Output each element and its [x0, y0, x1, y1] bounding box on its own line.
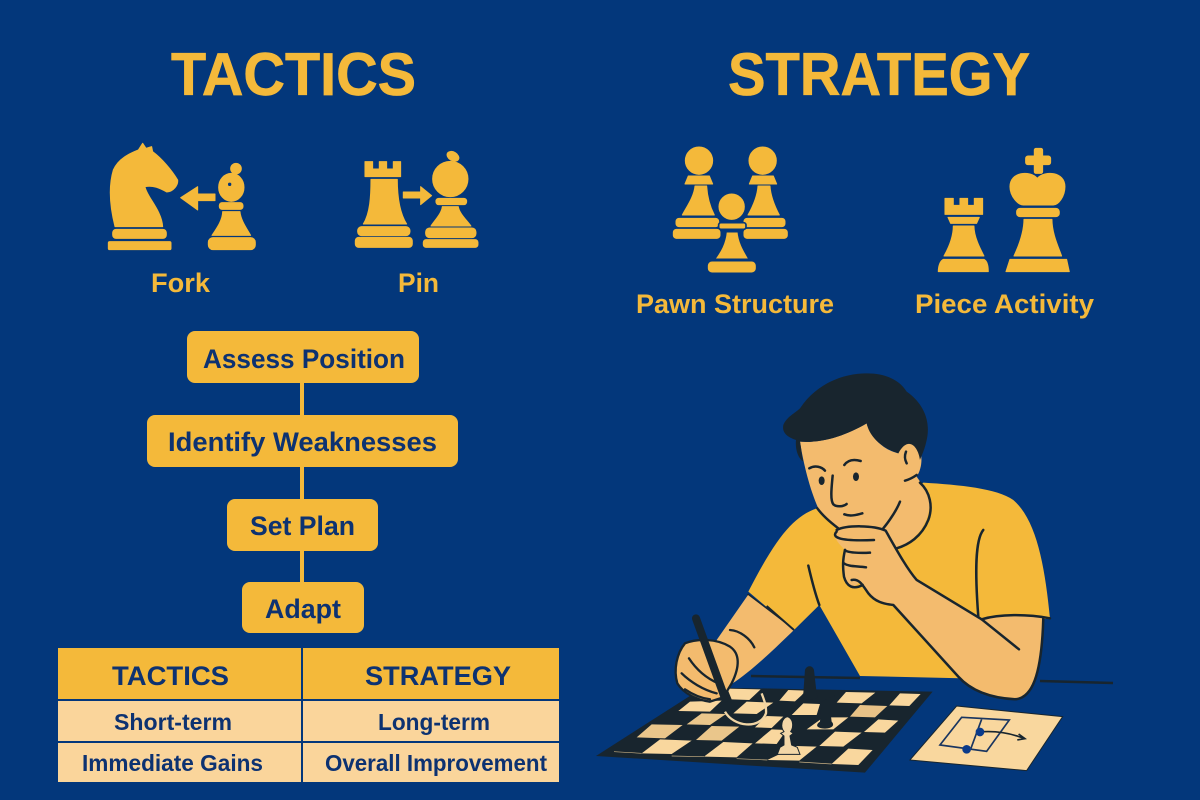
icon: pawn structure, three pawns [673, 147, 787, 272]
right arm and hand [835, 526, 1043, 699]
sleeve edge [767, 606, 794, 630]
flow connectors [300, 380, 304, 586]
hair [783, 373, 928, 462]
shirt [748, 483, 1050, 678]
pencil [696, 618, 725, 698]
hand lines [682, 630, 754, 699]
comparison table [58, 648, 559, 782]
board base [596, 687, 933, 773]
label: pawn structure: Pawn Structure [636, 289, 834, 319]
flow step: set plan: Set Plan [250, 511, 355, 541]
dark chess pieces [802, 666, 835, 729]
light squares [637, 689, 921, 765]
left arm and hand [717, 595, 794, 684]
board front highlight [614, 752, 832, 764]
flow step: identify weaknesses: Identify Weaknesses [168, 427, 437, 457]
icon: piece activity, rook and king [938, 148, 1069, 272]
label: fork: Fork [151, 268, 211, 298]
eyes [819, 476, 825, 485]
flow step: identify weaknesses [147, 415, 458, 467]
flow step: assess position [187, 331, 419, 383]
capture ring [725, 693, 766, 724]
flow step: adapt [242, 582, 364, 633]
title: strategy: STRATEGY [728, 41, 1030, 108]
light pawn [777, 717, 800, 754]
comparison table: Overall Improvement [325, 750, 547, 776]
label: pin: Pin [398, 268, 439, 298]
flow step: adapt: Adapt [265, 594, 341, 624]
comparison table: Immediate Gains [82, 750, 263, 776]
comparison table: STRATEGY [365, 661, 511, 691]
comparison table: Short-term [114, 709, 232, 735]
label: piece activity: Piece Activity [915, 289, 1094, 319]
head and neck [800, 423, 930, 548]
title: tactics: TACTICS [171, 41, 416, 108]
comparison table: Long-term [378, 709, 490, 735]
illustration: thinking person [748, 373, 1050, 699]
illustration: plan sheet with diagram [910, 706, 1063, 771]
comparison table: TACTICS [112, 661, 229, 691]
icon: fork, knight and bishop with arrow [108, 143, 255, 250]
flow step: set plan [227, 499, 378, 551]
illustration: chessboard [596, 595, 933, 773]
table edge line [751, 676, 1113, 683]
icon: pin, rook and bishop with arrow [355, 149, 478, 247]
face and body lines [748, 452, 1050, 699]
flow step: assess position: Assess Position [203, 344, 405, 374]
